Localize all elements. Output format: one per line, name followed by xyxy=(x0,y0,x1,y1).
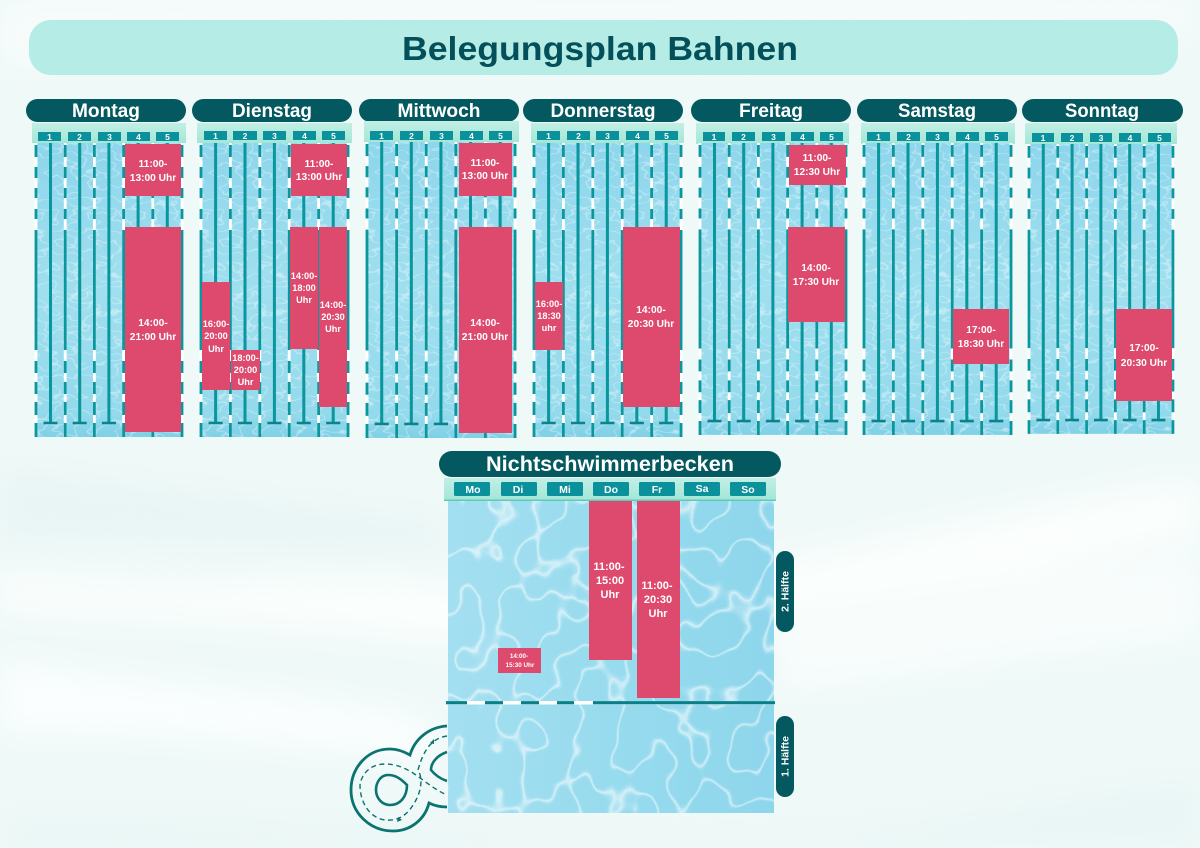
weekday labels: Mi xyxy=(559,484,571,496)
booking 14:00-20:30 xyxy=(319,227,347,407)
lane numbers: 2 xyxy=(1070,133,1075,143)
booking 11:00-13:00: 11:00- xyxy=(471,158,499,169)
booking 14:00-20:30: 14:00- xyxy=(636,305,666,316)
weekday labels: Fr xyxy=(652,484,662,496)
pool lanes xyxy=(201,143,348,437)
booking 18:00-20:00: Uhr xyxy=(238,377,254,387)
lane numbers: 4 xyxy=(469,131,474,141)
title xyxy=(29,20,1178,75)
label: 2. Hälfte xyxy=(776,551,794,632)
booking Fr 11:00-20:30: 11:00- xyxy=(641,580,673,592)
lane numbers: 5 xyxy=(994,132,999,142)
booking 14:00-21:00: 14:00- xyxy=(138,318,168,329)
booking 11:00-13:00 xyxy=(125,144,181,196)
panel: Donnerstag xyxy=(523,99,684,437)
lane numbers: 1 xyxy=(213,131,218,141)
lane numbers: 2 xyxy=(77,132,82,142)
lane numbers: 1 xyxy=(47,132,52,142)
weekday labels xyxy=(444,478,776,501)
lane numbers: 4 xyxy=(302,131,307,141)
booking 14:00-21:00 xyxy=(459,227,512,433)
lane numbers: 3 xyxy=(272,131,277,141)
lane numbers: 4 xyxy=(1128,133,1133,143)
booking 16:00-20:00 xyxy=(202,282,230,390)
booking 17:00-18:30: 18:30 Uhr xyxy=(958,339,1004,350)
booking Do 11:00-15:00: Uhr xyxy=(601,589,620,601)
booking 16:00-18:30: 18:30 xyxy=(537,311,561,321)
booking Di 14:00-15:30: 15:30 Uhr xyxy=(506,662,535,669)
heading: Dienstag: Dienstag xyxy=(232,101,312,122)
heading: Freitag: Freitag xyxy=(739,101,803,122)
pool lanes xyxy=(534,143,681,437)
booking Di 14:00-15:30 xyxy=(498,648,541,673)
booking 14:00-20:30: 14:00- xyxy=(320,300,346,310)
lane numbers: 1 xyxy=(379,131,384,141)
booking 16:00-20:00: 20:00 xyxy=(204,331,228,341)
lane numbers xyxy=(531,123,684,143)
booking 17:00-20:30: 20:30 Uhr xyxy=(1121,358,1167,369)
heading: Nichtschwimmerbecken xyxy=(439,451,781,477)
lane numbers xyxy=(696,123,849,144)
heading: Montag xyxy=(26,99,186,122)
booking Fr 11:00-20:30 xyxy=(637,501,680,698)
label: 2. Hälfte: 2. Hälfte xyxy=(780,571,792,612)
lane numbers: 3 xyxy=(439,131,444,141)
lane numbers xyxy=(197,123,352,143)
lane numbers: 4 xyxy=(800,132,805,142)
booking 11:00-13:00: 13:00 Uhr xyxy=(296,172,342,183)
lane numbers: 5 xyxy=(498,131,503,141)
weekday labels: So xyxy=(741,484,755,496)
booking 16:00-18:30: 16:00- xyxy=(536,299,562,309)
booking 14:00-20:30: 20:30 xyxy=(321,312,345,322)
icon: figure-eight swim track xyxy=(351,726,447,831)
booking Do 11:00-15:00: 15:00 xyxy=(596,575,624,587)
lane numbers: 1 xyxy=(1041,133,1046,143)
lane numbers xyxy=(861,123,1015,144)
heading: Samstag: Samstag xyxy=(898,101,976,122)
lane numbers xyxy=(1025,123,1177,144)
pool divider xyxy=(446,701,775,704)
lane numbers: 3 xyxy=(771,132,776,142)
booking 16:00-18:30 xyxy=(535,282,563,350)
weekday labels: Di xyxy=(513,484,523,496)
booking Fr 11:00-20:30: Uhr xyxy=(649,608,668,620)
panel: Nichtschwimmerbecken xyxy=(439,451,794,813)
lane numbers: 5 xyxy=(165,132,170,142)
heading: Mittwoch xyxy=(359,99,519,122)
heading: Sonntag: Sonntag xyxy=(1065,101,1139,122)
panel: Samstag xyxy=(857,99,1017,435)
booking 14:00-18:00: 18:00 xyxy=(292,283,316,293)
panel: Montag xyxy=(26,99,186,437)
booking 11:00-13:00: 11:00- xyxy=(305,159,333,170)
lane numbers: 1 xyxy=(546,131,551,141)
lane numbers: 4 xyxy=(136,132,141,142)
lane numbers: 3 xyxy=(107,132,112,142)
booking 17:00-18:30: 17:00- xyxy=(966,325,996,336)
lane numbers: 2 xyxy=(243,131,248,141)
booking 14:00-20:30: Uhr xyxy=(325,324,341,334)
pool lanes xyxy=(700,143,846,435)
booking 17:00-18:30 xyxy=(953,309,1009,364)
booking 14:00-18:00 xyxy=(290,227,318,349)
booking 14:00-17:30: 14:00- xyxy=(801,263,831,274)
booking 16:00-18:30: uhr xyxy=(542,323,557,333)
booking Do 11:00-15:00: 11:00- xyxy=(593,561,625,573)
booking 11:00-12:30 xyxy=(789,145,846,185)
lane numbers: 3 xyxy=(935,132,940,142)
booking Di 14:00-15:30: 14:00- xyxy=(510,653,528,660)
lane numbers xyxy=(32,123,186,143)
booking 11:00-13:00 xyxy=(459,143,512,196)
title: Belegungsplan Bahnen xyxy=(402,30,798,67)
panel: Sonntag xyxy=(1022,99,1183,434)
label: 1. Hälfte xyxy=(776,716,794,797)
weekday labels: Do xyxy=(604,484,618,496)
lane numbers: 3 xyxy=(605,131,610,141)
booking Fr 11:00-20:30: 20:30 xyxy=(644,594,672,606)
booking 18:00-20:00: 20:00 xyxy=(234,365,257,375)
booking 14:00-17:30 xyxy=(788,227,845,322)
booking 14:00-20:30: 20:30 Uhr xyxy=(628,319,674,330)
booking 14:00-18:00: Uhr xyxy=(296,295,312,305)
pool lanes xyxy=(1029,144,1173,434)
booking 16:00-20:00: Uhr xyxy=(208,344,224,354)
booking 16:00-20:00: 16:00- xyxy=(203,319,229,329)
lane numbers: 3 xyxy=(1099,133,1104,143)
heading: Nichtschwimmerbecken: Nichtschwimmerbecken xyxy=(486,453,734,476)
heading: Samstag xyxy=(857,99,1017,122)
booking 14:00-21:00: 21:00 Uhr xyxy=(462,332,508,343)
lane numbers: 2 xyxy=(741,132,746,142)
lane numbers: 5 xyxy=(829,132,834,142)
lane numbers xyxy=(364,121,519,142)
pool lanes xyxy=(864,143,1011,435)
pool lanes xyxy=(36,143,182,437)
pool water xyxy=(448,501,774,813)
panel: Dienstag xyxy=(192,99,352,437)
heading: Dienstag xyxy=(192,99,352,122)
lane numbers: 2 xyxy=(576,131,581,141)
lane numbers: 5 xyxy=(331,131,336,141)
booking Do 11:00-15:00 xyxy=(589,501,632,660)
booking 11:00-13:00: 13:00 Uhr xyxy=(130,173,176,184)
weekday labels: Sa xyxy=(696,483,709,495)
booking 14:00-21:00: 21:00 Uhr xyxy=(130,332,176,343)
booking 11:00-13:00 xyxy=(291,144,347,196)
label: 1. Hälfte: 1. Hälfte xyxy=(780,736,792,777)
lane numbers: 4 xyxy=(965,132,970,142)
booking 11:00-12:30: 12:30 Uhr xyxy=(794,167,840,178)
panel: Mittwoch xyxy=(359,99,519,438)
lane numbers: 1 xyxy=(876,132,881,142)
heading: Freitag xyxy=(691,99,851,122)
lane numbers: 2 xyxy=(409,131,414,141)
booking 11:00-13:00: 13:00 Uhr xyxy=(462,171,508,182)
heading: Mittwoch: Mittwoch xyxy=(398,101,480,122)
booking 18:00-20:00 xyxy=(231,350,260,390)
booking 18:00-20:00: 18:00- xyxy=(232,353,259,363)
panel: Freitag xyxy=(691,99,851,435)
booking 17:00-20:30: 17:00- xyxy=(1129,343,1159,354)
booking 14:00-20:30 xyxy=(623,227,680,407)
booking 14:00-21:00 xyxy=(125,227,181,432)
heading: Sonntag xyxy=(1022,99,1183,122)
lane numbers: 2 xyxy=(906,132,911,142)
pool lanes xyxy=(367,142,515,438)
lane numbers: 5 xyxy=(664,131,669,141)
booking 14:00-18:00: 14:00- xyxy=(291,271,317,281)
lane numbers: 5 xyxy=(1157,133,1162,143)
lane numbers: 1 xyxy=(712,132,717,142)
heading: Donnerstag: Donnerstag xyxy=(550,101,656,122)
heading: Montag: Montag xyxy=(72,101,140,122)
booking 17:00-20:30 xyxy=(1116,309,1172,401)
weekday labels: Mo xyxy=(465,484,481,496)
heading: Donnerstag xyxy=(523,99,683,122)
booking 14:00-21:00: 14:00- xyxy=(470,318,500,329)
booking 14:00-17:30: 17:30 Uhr xyxy=(793,277,839,288)
booking 11:00-13:00: 11:00- xyxy=(139,159,167,170)
booking 11:00-12:30: 11:00- xyxy=(803,153,831,164)
lane numbers: 4 xyxy=(635,131,640,141)
